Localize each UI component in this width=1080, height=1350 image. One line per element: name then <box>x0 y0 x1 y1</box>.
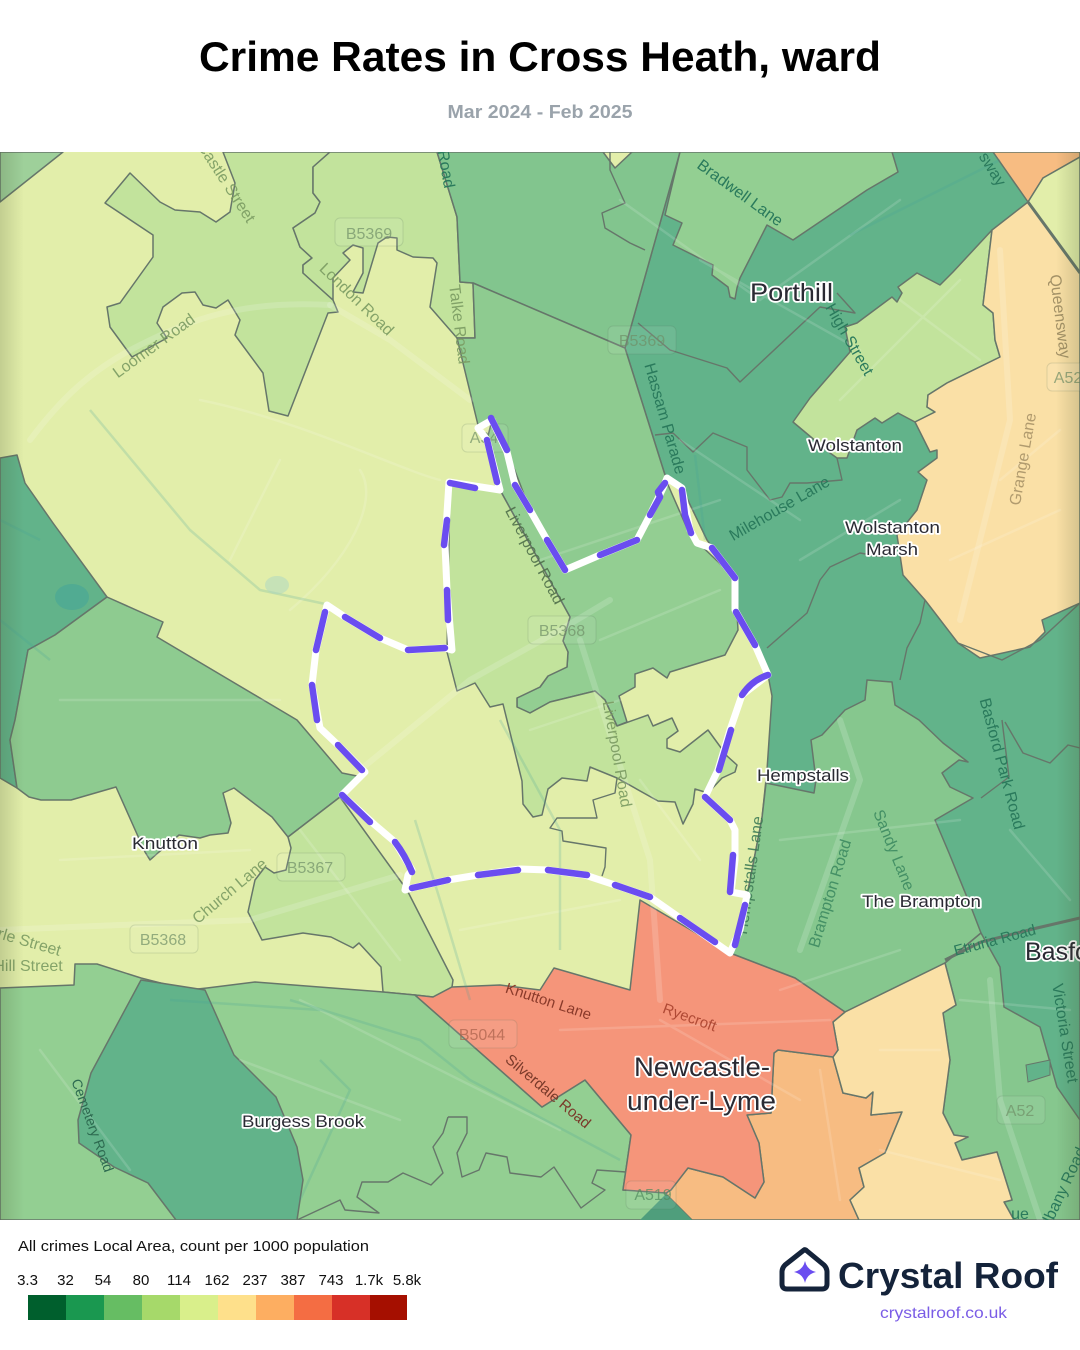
road labels: Silverdale Road <box>502 1051 594 1132</box>
place labels: The Brampton <box>862 892 981 911</box>
region: bottom-left green <box>0 964 700 1220</box>
region: Knutton north green <box>10 597 362 860</box>
road labels: Road <box>434 149 457 190</box>
ward boundary: Cross Heath <box>312 418 768 953</box>
road labels: Church Lane <box>190 856 271 928</box>
region: top centre green <box>437 152 680 348</box>
road labels: Loomer Road <box>110 311 199 382</box>
legend scale labels: 743 <box>318 1272 344 1289</box>
legend scale labels: 162 <box>204 1272 230 1289</box>
region: top-left corner <box>0 152 63 202</box>
legend scale labels: 54 <box>95 1272 111 1289</box>
road labels: Victoria Street <box>1048 982 1080 1085</box>
road labels: sway <box>975 150 1009 190</box>
place labels: Hempstalls <box>757 766 849 785</box>
road shields: A519 <box>634 1187 672 1204</box>
region: Brampton green <box>730 680 981 1012</box>
website link: crystalroof.co.uk <box>880 1305 1008 1322</box>
region: left dark green <box>0 455 107 788</box>
logo wordmark: Crystal Roof <box>838 1255 1059 1296</box>
road shields: A52 <box>1006 1103 1034 1120</box>
region: Wolstanton light green <box>793 230 1000 458</box>
place labels: Newcastle- <box>634 1052 770 1082</box>
region: small dark south <box>640 1194 692 1220</box>
road labels: High Street <box>822 301 877 379</box>
region: central green north of ward <box>457 283 667 570</box>
road labels: Liverpool Road <box>599 700 634 809</box>
region: pale orange south <box>833 963 1014 1220</box>
region: pale orange north-east <box>897 202 1080 658</box>
road shields: B5369 <box>346 226 392 243</box>
place labels: Knutton <box>132 834 198 853</box>
road shields: B5368 <box>140 932 186 949</box>
place labels: Wolstanton <box>845 518 940 537</box>
legend scale labels: 5.8k <box>393 1272 422 1289</box>
road labels: Castle Street <box>193 139 258 226</box>
region: ward light green <box>447 485 737 824</box>
road labels: Brampton Road <box>806 838 855 950</box>
road labels: Talke Road <box>445 284 472 365</box>
legend scale labels: 237 <box>242 1272 268 1289</box>
legend title: All crimes Local Area, count per 1000 population <box>18 1238 369 1255</box>
region: Burgess Brook dark green <box>78 980 303 1220</box>
road labels: Hempstalls Lane <box>734 815 767 936</box>
road labels: Ryecroft <box>660 1000 719 1036</box>
road labels: ue <box>1011 1206 1029 1223</box>
region: small patch top <box>603 152 632 168</box>
region: orange south <box>666 1050 902 1220</box>
place labels: Burgess Brook <box>242 1112 365 1131</box>
place labels: Wolstanton <box>808 436 902 455</box>
road labels: Liverpool Road <box>501 504 567 607</box>
legend scale labels: 387 <box>280 1272 306 1289</box>
place labels: under-Lyme <box>627 1086 776 1116</box>
road shields: B5368 <box>539 623 585 640</box>
region: north light green <box>293 152 475 338</box>
road shields: B5369 <box>619 333 665 350</box>
region: east lower green <box>943 933 1080 1220</box>
roads and water <box>0 160 1070 1220</box>
region: dark patch east <box>1026 1060 1050 1082</box>
icon: Crystal Roof house logo <box>782 1250 827 1289</box>
legend scale labels: 114 <box>167 1272 191 1289</box>
region: B5367 light green <box>248 797 453 997</box>
legend scale labels <box>17 1272 422 1289</box>
road labels: Grange Lane <box>1007 412 1040 507</box>
legend colour bar <box>28 1295 407 1320</box>
legend scale labels: 1.7k <box>355 1272 384 1289</box>
legend scale labels: 32 <box>57 1272 74 1289</box>
road labels: Milehouse Lane <box>727 473 833 545</box>
road labels: Sandy Lane <box>869 808 917 893</box>
place labels: Porthill <box>750 279 833 307</box>
road labels: Bradwell Lane <box>694 157 786 230</box>
region: dark green east <box>625 152 1080 1220</box>
legend scale labels: 3.3 <box>17 1272 38 1289</box>
legend scale labels: 80 <box>133 1272 149 1289</box>
road labels: Etruria Road <box>952 922 1038 960</box>
boundary lines <box>297 152 1080 1220</box>
region: Newcastle red centre <box>415 900 845 1198</box>
road labels: London Road <box>316 260 397 339</box>
region: ward mid green <box>487 420 738 726</box>
road labels: Hassam Parade <box>640 361 688 476</box>
region: top right pale <box>1028 157 1080 273</box>
road labels: Knutton Lane <box>503 980 593 1024</box>
road shields: B5044 <box>459 1027 505 1044</box>
region: west light green <box>105 152 338 416</box>
subtitle: date range: Mar 2024 - Feb 2025 <box>448 102 632 122</box>
road labels: Queensway <box>1046 273 1073 359</box>
region: top right orange <box>993 152 1080 202</box>
road shields <box>130 218 1080 1209</box>
place labels: Marsh <box>866 540 918 559</box>
title: Crime Rates in Cross Heath, ward <box>199 33 881 80</box>
road labels: Cemetery Road <box>68 1076 117 1174</box>
road shields: B5367 <box>287 860 333 877</box>
region: Bradwell green <box>665 152 898 299</box>
place labels <box>132 279 1080 1131</box>
road labels: Basford Park Road <box>976 696 1027 831</box>
road shields: A34 <box>470 430 498 447</box>
